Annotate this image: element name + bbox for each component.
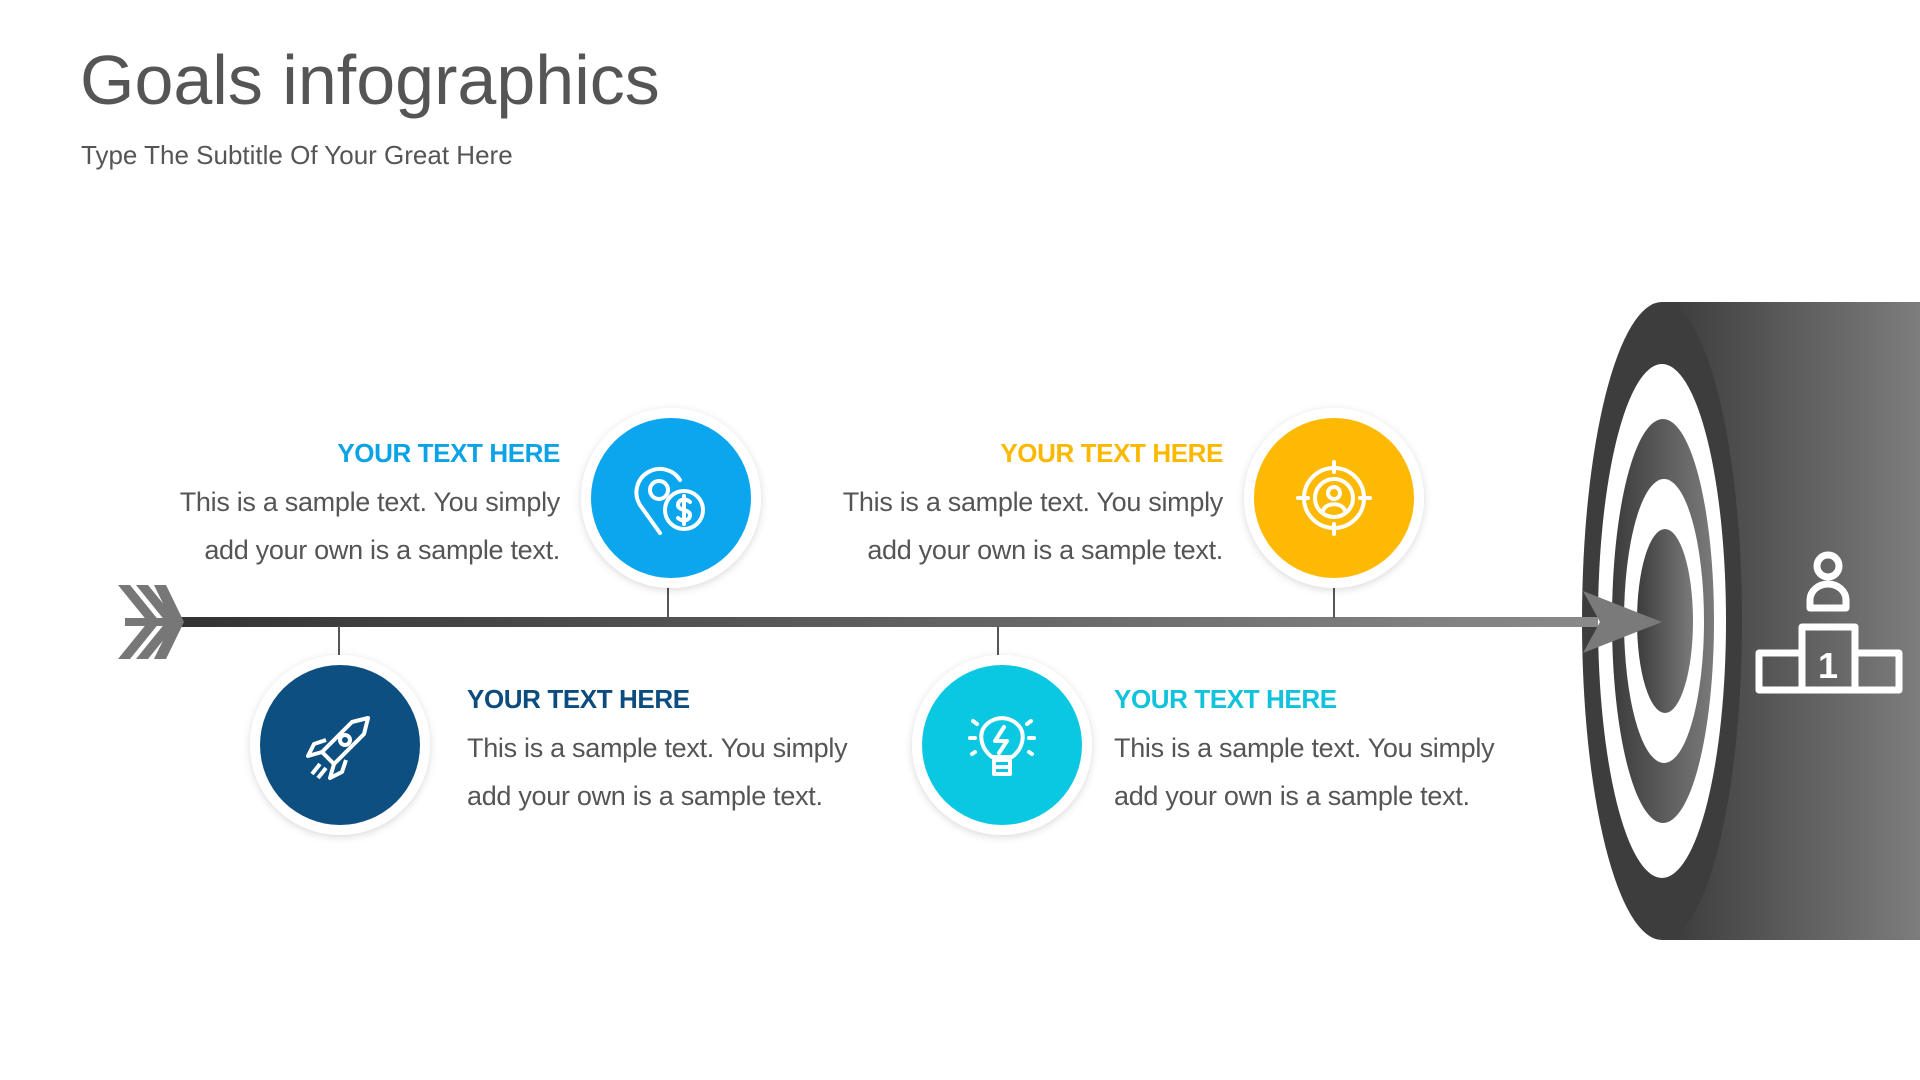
text block 3 [1114,684,1494,811]
text block 1: This is a sample text. You simply [180,487,560,517]
target [1582,302,1920,940]
text block 3: YOUR TEXT HERE [1114,684,1337,714]
icon circle 2: rocket [250,655,430,835]
podium number: 1 [1818,645,1838,686]
text block 4: add your own is a sample text. [867,535,1223,565]
text block 2: This is a sample text. You simply [467,733,847,763]
text block 3: This is a sample text. You simply [1114,733,1494,763]
subtitle: Type The Subtitle Of Your Great Here [81,140,513,170]
text block 2: YOUR TEXT HERE [467,684,690,714]
text block 1: add your own is a sample text. [204,535,560,565]
text block 1 [180,438,560,565]
text block 2: add your own is a sample text. [467,781,823,811]
text block 4: This is a sample text. You simply [843,487,1223,517]
connectors [339,585,1334,655]
title: Goals infographics [80,41,660,119]
text block 4: YOUR TEXT HERE [1000,438,1223,468]
icon circle 4: target user [1244,408,1424,588]
icon: podium [1759,555,1899,690]
tail feathers [118,585,184,659]
text block 2 [467,684,848,811]
text block 4 [843,438,1224,565]
timeline arrow [178,591,1662,653]
icon circle 1: location dollar [581,408,761,588]
text block 1: YOUR TEXT HERE [337,438,560,468]
icon circle 3: light bulb [912,655,1092,835]
text block 3: add your own is a sample text. [1114,781,1470,811]
